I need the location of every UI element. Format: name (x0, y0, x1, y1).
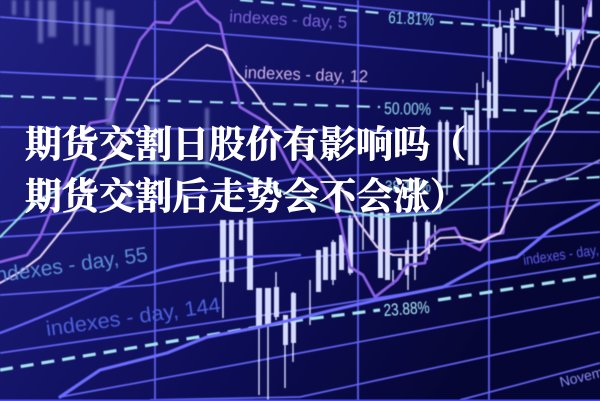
curve: day 200 (60, 203, 600, 397)
label: day 144: indexes - day, 144 (44, 294, 222, 341)
label: 61.81%: 61.81% (388, 8, 435, 29)
candlesticks (220, 0, 592, 400)
title line 1: 期货交割日股价有影响吗（ (25, 124, 467, 165)
label: 23.88%: 23.88% (383, 298, 430, 320)
label: day 5: indexes - day, 5 (229, 7, 348, 32)
curve: day 55 (0, 83, 600, 237)
label: day 12: indexes - day, 12 (244, 63, 368, 86)
faint left candlesticks (12, 0, 209, 205)
curve: day 144 (0, 255, 300, 333)
curve: day 12 (0, 35, 600, 283)
curve: day 5 (0, 0, 590, 297)
label: 50.00%: 50.00% (384, 99, 431, 119)
curve: lower right (513, 160, 600, 200)
title line 2: 期货交割后走势会不会涨） (25, 176, 467, 217)
label: 38.10%: 38.10% (385, 177, 431, 196)
